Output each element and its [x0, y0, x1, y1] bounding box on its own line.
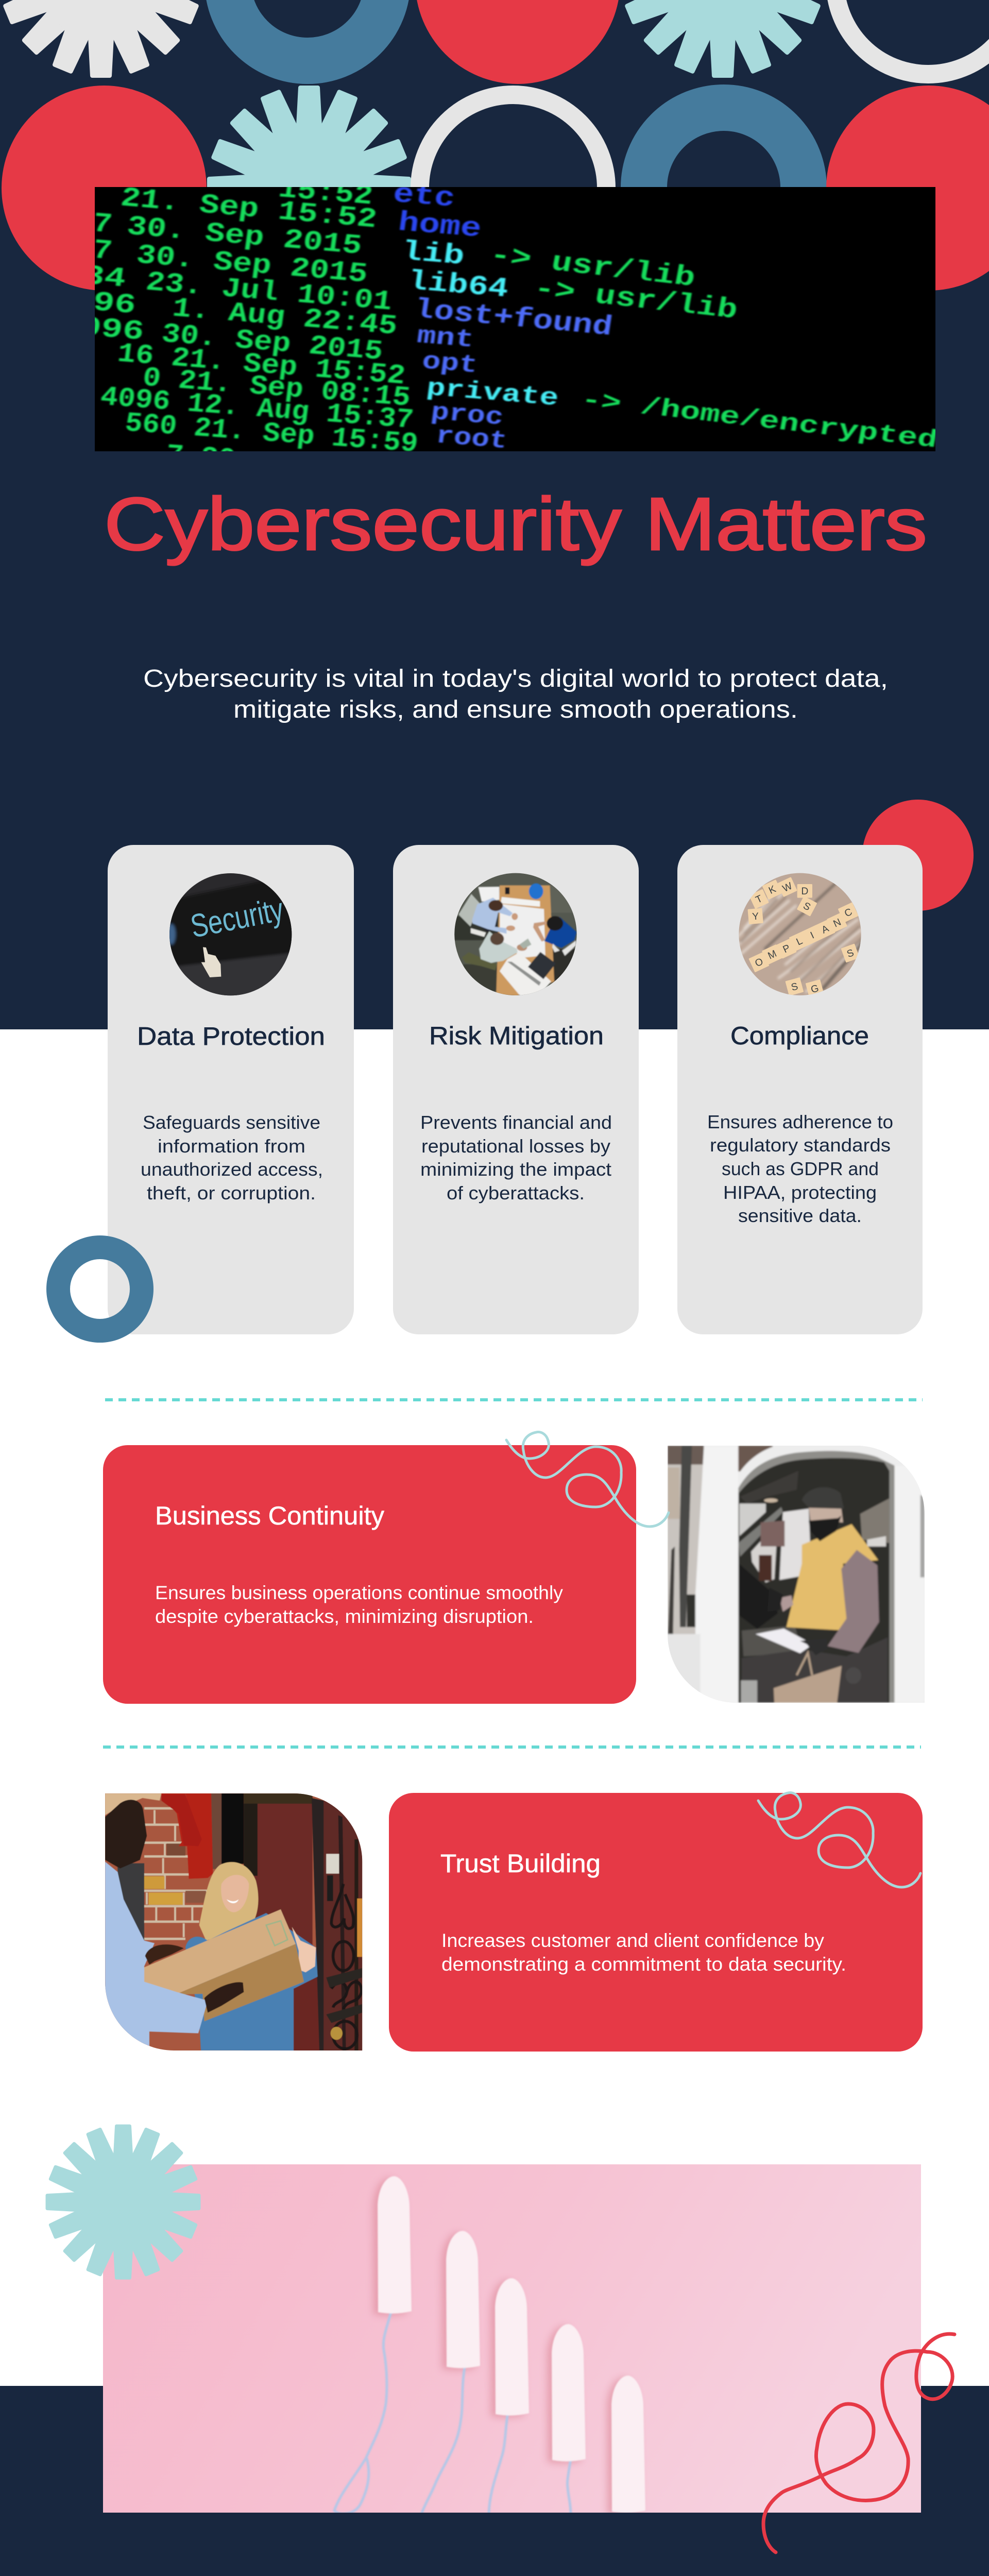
panel: trust building	[389, 1793, 923, 2052]
squiggle: red	[763, 2334, 954, 2552]
hero photo: terminal listing: 30. Sep 2015	[160, 319, 385, 368]
icon: red circle second row right	[826, 86, 989, 291]
card text: unauthorized access,	[141, 1159, 323, 1180]
intro paragraph: mitigate risks, and ensure smooth operations.	[233, 696, 798, 723]
card heading: Data Protection	[137, 1023, 325, 1050]
hero photo: terminal listing: private	[425, 374, 560, 413]
hero photo: terminal listing: -> usr/lib	[487, 240, 697, 294]
photo: letter tiles on wood: T	[754, 893, 764, 906]
photo: security screen: Security	[187, 891, 286, 945]
photo: letter tiles on wood: S	[790, 981, 799, 993]
icon: blue ring over first card	[58, 1247, 142, 1331]
icon: teal star second row	[209, 88, 409, 287]
hero photo: terminal listing	[95, 187, 935, 451]
photo: letter tiles on wood: S	[845, 947, 856, 960]
card text: theft, or corruption.	[147, 1182, 316, 1204]
icon: white ring second row	[420, 95, 606, 281]
icon: teal star over photo	[47, 2126, 199, 2278]
hero photo: terminal listing: 4096 12. Aug 15:37	[98, 382, 415, 436]
photo: delivery driver in van	[664, 1440, 929, 1708]
hero photo: terminal listing: 30. Sep 2015	[125, 211, 364, 262]
squiggle: trust building	[758, 1793, 920, 1887]
intro paragraph	[143, 665, 888, 723]
hero photo: terminal listing: mnt	[415, 322, 475, 354]
icon: blue ring top row	[228, 0, 387, 61]
card text: information from	[158, 1136, 305, 1157]
panel heading: Trust Building	[440, 1849, 601, 1878]
photo: letter tiles on wood	[739, 873, 861, 995]
hero photo: terminal listing: 7	[91, 235, 114, 267]
card text: reputational losses by	[421, 1136, 610, 1157]
panel: risk mitigation card	[393, 845, 639, 1334]
hero photo: terminal listing: proc	[429, 398, 505, 432]
navy footer background	[0, 2386, 989, 2576]
photo: letter tiles on wood: C	[843, 907, 854, 920]
hero photo: terminal listing: 96	[91, 287, 138, 321]
hero photo: terminal listing: root	[434, 422, 509, 455]
hero photo: terminal listing: 16 21. Sep 15:52	[115, 338, 407, 392]
hero photo: terminal listing: 0 21. Sep 08:15	[141, 363, 412, 414]
card heading: Compliance	[730, 1022, 869, 1050]
hero photo: terminal listing: 30. Sep 2015	[134, 240, 369, 290]
hero photo: terminal listing: 23. Jul 10:01	[144, 267, 394, 318]
card text: sensitive data.	[738, 1205, 862, 1226]
icon: red circle second row left	[2, 86, 207, 291]
panel text: Increases customer and client confidence by	[441, 1930, 825, 1951]
hero photo: terminal listing: opt	[420, 348, 479, 380]
hero photo: terminal listing: lib	[399, 236, 466, 273]
panel heading: Business Continuity	[155, 1501, 384, 1530]
photo: letter tiles on wood: D	[801, 886, 808, 897]
icon: red circle top row	[415, 0, 620, 84]
photo: letter tiles on wood: M	[766, 948, 778, 962]
photo: letter tiles on wood: I	[809, 930, 816, 941]
panel text	[155, 1582, 563, 1627]
hero photo: terminal listing: 7	[91, 208, 114, 241]
squiggle: business continuity	[506, 1432, 669, 1527]
panel: data protection card	[108, 845, 354, 1334]
card text: minimizing the impact	[420, 1159, 611, 1180]
hero photo: terminal listing: 1. Aug 22:45	[170, 293, 399, 342]
card text: Prevents financial and	[420, 1112, 612, 1133]
photo: letter tiles on wood: K	[767, 884, 778, 896]
icon: white star top row	[1, 0, 201, 76]
panel text	[441, 1930, 846, 1975]
navy header background	[0, 0, 989, 1029]
top pattern: decorative shapes	[1, 0, 989, 291]
photo: letter tiles on wood: P	[781, 943, 792, 955]
card text	[707, 1111, 893, 1226]
card text: regulatory standards	[710, 1134, 891, 1156]
photo: letter tiles on wood: N	[832, 917, 843, 930]
hero photo: terminal listing: -> /home/encrypted	[579, 386, 940, 455]
icon: white ring top row	[835, 0, 989, 74]
photo: letter tiles on wood: L	[795, 936, 805, 947]
panel: compliance card	[677, 845, 923, 1334]
photo: pink flat lay	[103, 2164, 921, 2515]
card text: Ensures adherence to	[707, 1111, 893, 1132]
icon: blue ring second row	[644, 108, 804, 267]
hero photo: terminal listing: home	[396, 207, 483, 245]
hero photo: terminal listing: lost+found	[412, 294, 615, 343]
card text: such as GDPR and	[722, 1158, 879, 1179]
card text	[141, 1112, 323, 1204]
hero photo: terminal listing: 15:52	[277, 174, 374, 212]
hero photo: terminal listing: -> usr/lib	[532, 274, 740, 327]
hero photo: terminal listing: 21. Sep 15:52	[118, 183, 379, 235]
photo: letter tiles on wood: Y	[752, 911, 759, 923]
hero photo: terminal listing: etc	[391, 179, 457, 215]
photo: letter tiles on wood: A	[820, 923, 831, 936]
intro paragraph: Cybersecurity is vital in today's digital world to protect data,	[143, 665, 888, 692]
hero photo: terminal listing: 096	[78, 312, 146, 348]
icon: teal star top row	[623, 0, 823, 76]
hero photo: terminal listing: 34	[81, 261, 128, 295]
icon: red circle behind card	[862, 800, 974, 911]
card heading: Risk Mitigation	[429, 1022, 604, 1050]
hero photo: terminal listing: 560 21. Sep 15:59	[123, 408, 420, 460]
photo: letter tiles on wood: S	[801, 901, 812, 913]
card text: HIPAA, protecting	[723, 1182, 877, 1203]
hero photo: terminal listing: 7 30	[164, 440, 237, 476]
photo: letter tiles on wood: W	[781, 880, 794, 894]
title: Cybersecurity Matters	[104, 482, 927, 566]
panel text: despite cyberattacks, minimizing disruption.	[155, 1606, 534, 1627]
photo: parcel delivery at door	[103, 1788, 367, 2056]
card text	[420, 1112, 612, 1204]
panel: business continuity	[103, 1445, 636, 1704]
card text: Safeguards sensitive	[143, 1112, 320, 1133]
card text: of cyberattacks.	[447, 1182, 585, 1204]
panel text: Ensures business operations continue smoothly	[155, 1582, 563, 1603]
panel text: demonstrating a commitment to data security.	[441, 1954, 846, 1975]
hero photo: terminal listing: lib64	[406, 266, 510, 305]
photo: security screen	[169, 873, 292, 995]
photo: letter tiles on wood: O	[754, 956, 765, 969]
photo: letter tiles on wood: G	[810, 983, 820, 995]
photo: team around table	[454, 873, 577, 995]
